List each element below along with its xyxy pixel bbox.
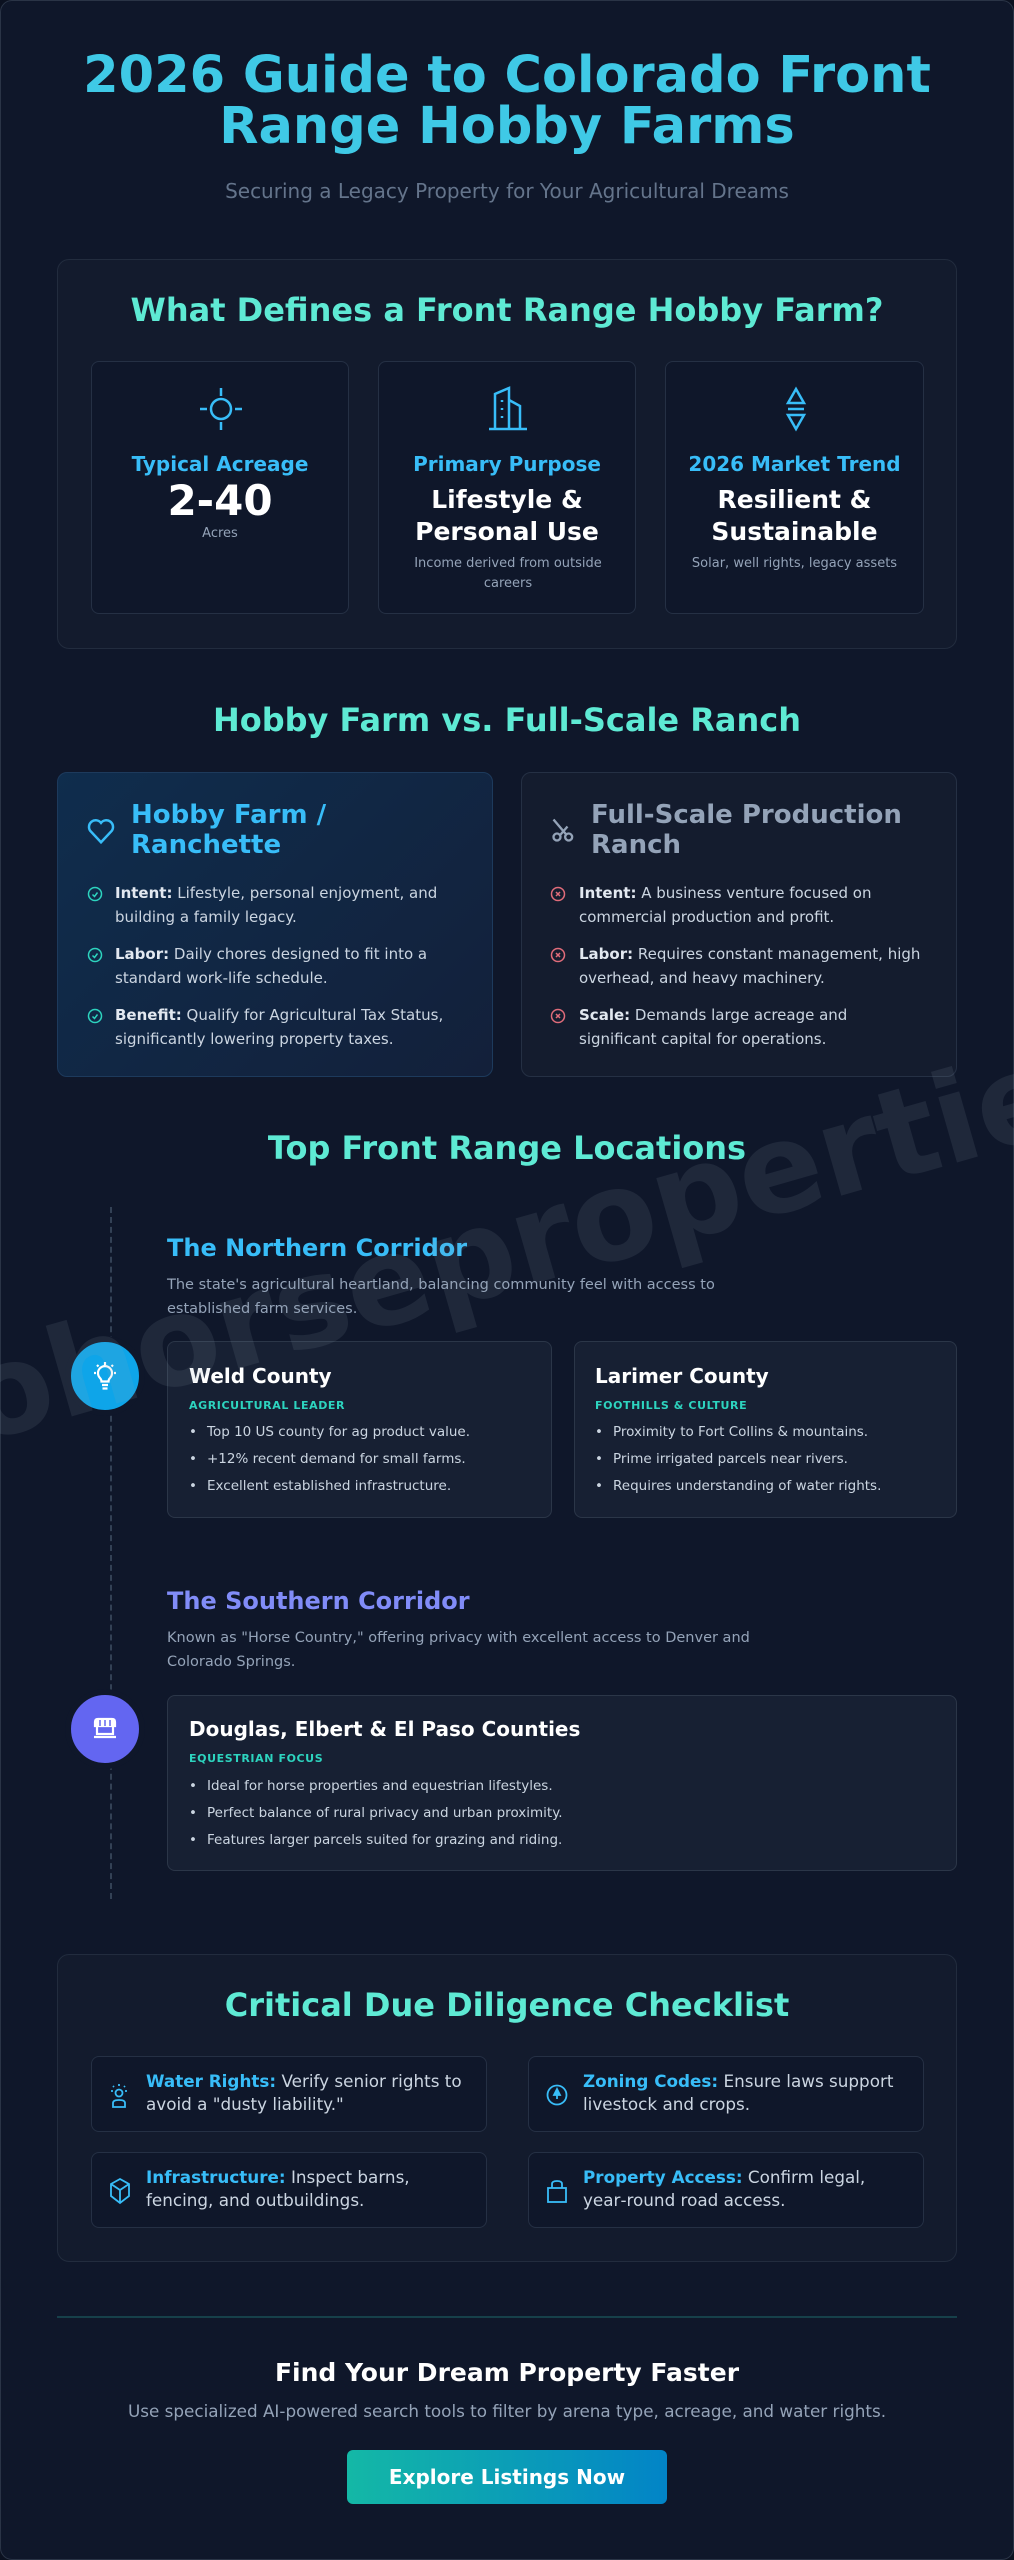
- card: larimer county: •: [595, 1451, 603, 1467]
- items: Scale: Demands large acreage and significant capital for operations.: [579, 1006, 847, 1048]
- title: Ranch: [591, 830, 681, 860]
- note: Income derived from outside careers: [414, 556, 602, 591]
- card: larimer county: Requires understanding of water rights.: [613, 1478, 881, 1494]
- items: Benefit: Qualify for Agricultural Tax Status, significantly lowering property taxes.: [115, 1006, 443, 1048]
- value: [415, 485, 599, 546]
- icon: crosshair: [200, 388, 242, 430]
- items: [88, 884, 443, 1048]
- card: weld county: Top 10 US county for ag product value.: [207, 1424, 470, 1440]
- timeline line: [110, 1207, 112, 1899]
- northern description: The state's agricultural heartland, balancing community feel with access to established farm services.: [167, 1277, 715, 1317]
- card: douglas elbert el paso: •: [189, 1832, 197, 1848]
- value: Sustainable: [711, 517, 878, 546]
- card: douglas elbert el paso: [167, 1695, 957, 1871]
- value: 2-40: [167, 476, 273, 525]
- card: weld county: +12% recent demand for small farms.: [207, 1451, 466, 1467]
- heading: locations: Top Front Range Locations: [268, 1129, 746, 1167]
- cta subtext: Use specialized AI-powered search tools to filter by arena type, acreage, and water rights.: [128, 2401, 886, 2421]
- cta heading: Find Your Dream Property Faster: [275, 2358, 739, 2387]
- card: weld county: AGRICULTURAL LEADER: [189, 1399, 345, 1412]
- card: primary purpose: [378, 361, 636, 614]
- icon: building: [489, 386, 527, 430]
- heading: checklist: Critical Due Diligence Checklist: [225, 1986, 789, 2024]
- value: Resilient &: [717, 485, 872, 514]
- card: larimer county: Proximity to Fort Collins & mountains.: [613, 1424, 868, 1440]
- card: weld county: •: [189, 1478, 197, 1494]
- icon: lightbulb: [65, 1336, 145, 1416]
- subtitle: Securing a Legacy Property for Your Agricultural Dreams: [225, 179, 789, 203]
- panel: what defines: [57, 259, 957, 649]
- item: infrastructure: [91, 2152, 487, 2228]
- card: weld county: •: [189, 1424, 197, 1440]
- divider: [57, 2316, 957, 2318]
- title: Hobby Farm /: [131, 800, 326, 830]
- label: 2026 Market Trend: [688, 452, 901, 476]
- panel: hobby farm: [57, 772, 493, 1077]
- icon: heart: [88, 819, 114, 844]
- card: typical acreage: [91, 361, 349, 614]
- note: Solar, well rights, legacy assets: [692, 556, 897, 571]
- card: douglas elbert el paso: Ideal for horse properties and equestrian lifestyles.: [207, 1778, 553, 1794]
- item: property access: [528, 2152, 924, 2228]
- item: water rights: [91, 2056, 487, 2132]
- card: douglas elbert el paso: Douglas, Elbert & El Paso Counties: [189, 1717, 580, 1741]
- button: explore listings: Explore Listings Now: [389, 2465, 625, 2489]
- card: larimer county: Prime irrigated parcels near rivers.: [613, 1451, 848, 1467]
- card: douglas elbert el paso: Features larger parcels suited for grazing and riding.: [207, 1832, 562, 1848]
- item: zoning codes: [528, 2056, 924, 2132]
- item: infrastructure: Infrastructure: Inspect barns, fencing, and outbuildings.: [146, 2167, 410, 2210]
- items: [550, 884, 920, 1048]
- card: larimer county: [574, 1341, 957, 1518]
- card: larimer county: •: [595, 1478, 603, 1494]
- title: 2026 Guide to Colorado Front: [83, 46, 931, 105]
- card: weld county: Excellent established infrastructure.: [207, 1478, 451, 1494]
- title: Full-Scale Production: [591, 800, 902, 830]
- unit: Acres: [202, 526, 238, 541]
- card: weld county: [167, 1341, 552, 1518]
- title: Range Hobby Farms: [219, 97, 795, 156]
- southern description: Known as "Horse Country," offering privacy with excellent access to Denver and Colorado Springs.: [167, 1630, 750, 1670]
- card: larimer county: FOOTHILLS & CULTURE: [595, 1399, 747, 1412]
- card: douglas elbert el paso: EQUESTRIAN FOCUS: [189, 1752, 323, 1765]
- items: Labor: Daily chores designed to fit into a standard work-life schedule.: [115, 945, 427, 987]
- card: weld county: Weld County: [189, 1364, 332, 1388]
- card: douglas elbert el paso: •: [189, 1805, 197, 1821]
- item: zoning codes: Zoning Codes: Ensure laws support livestock and crops.: [583, 2071, 893, 2114]
- card: weld county: •: [189, 1451, 197, 1467]
- label: Typical Acreage: [132, 452, 308, 476]
- item: property access: Property Access: Confirm legal, year‑round road access.: [583, 2167, 865, 2210]
- card: douglas elbert el paso: •: [189, 1778, 197, 1794]
- northern corridor heading: The Northern Corridor: [167, 1234, 467, 1262]
- title: [591, 800, 902, 860]
- items: Intent: A business venture focused on commercial production and profit.: [579, 884, 871, 926]
- southern corridor heading: The Southern Corridor: [167, 1587, 470, 1615]
- card: market trend: [665, 361, 924, 614]
- button: explore listings: [347, 2450, 667, 2504]
- item: water rights: Water Rights: Verify senior rights to avoid a "dusty liability.": [146, 2071, 462, 2114]
- card: larimer county: Larimer County: [595, 1364, 769, 1388]
- card: douglas elbert el paso: Perfect balance of rural privacy and urban proximity.: [207, 1805, 563, 1821]
- title: Ranchette: [131, 830, 281, 860]
- heading: comparison: Hobby Farm vs. Full-Scale Ranch: [213, 701, 801, 739]
- title: [131, 800, 326, 860]
- icon: store: [65, 1689, 145, 1769]
- panel: production ranch: [521, 772, 957, 1077]
- items: Labor: Requires constant management, high overhead, and heavy machinery.: [579, 945, 920, 987]
- heading: what defines: What Defines a Front Range Hobby Farm?: [131, 291, 883, 329]
- value: Lifestyle &: [431, 485, 583, 514]
- title: [83, 46, 931, 156]
- panel: checklist: [57, 1954, 957, 2262]
- items: Intent: Lifestyle, personal enjoyment, and building a family legacy.: [115, 884, 437, 926]
- icon: scissors: [552, 818, 574, 842]
- value: Personal Use: [415, 517, 599, 546]
- label: Primary Purpose: [413, 452, 601, 476]
- value: [711, 485, 878, 546]
- icon: arrows: [786, 386, 806, 432]
- card: larimer county: •: [595, 1424, 603, 1440]
